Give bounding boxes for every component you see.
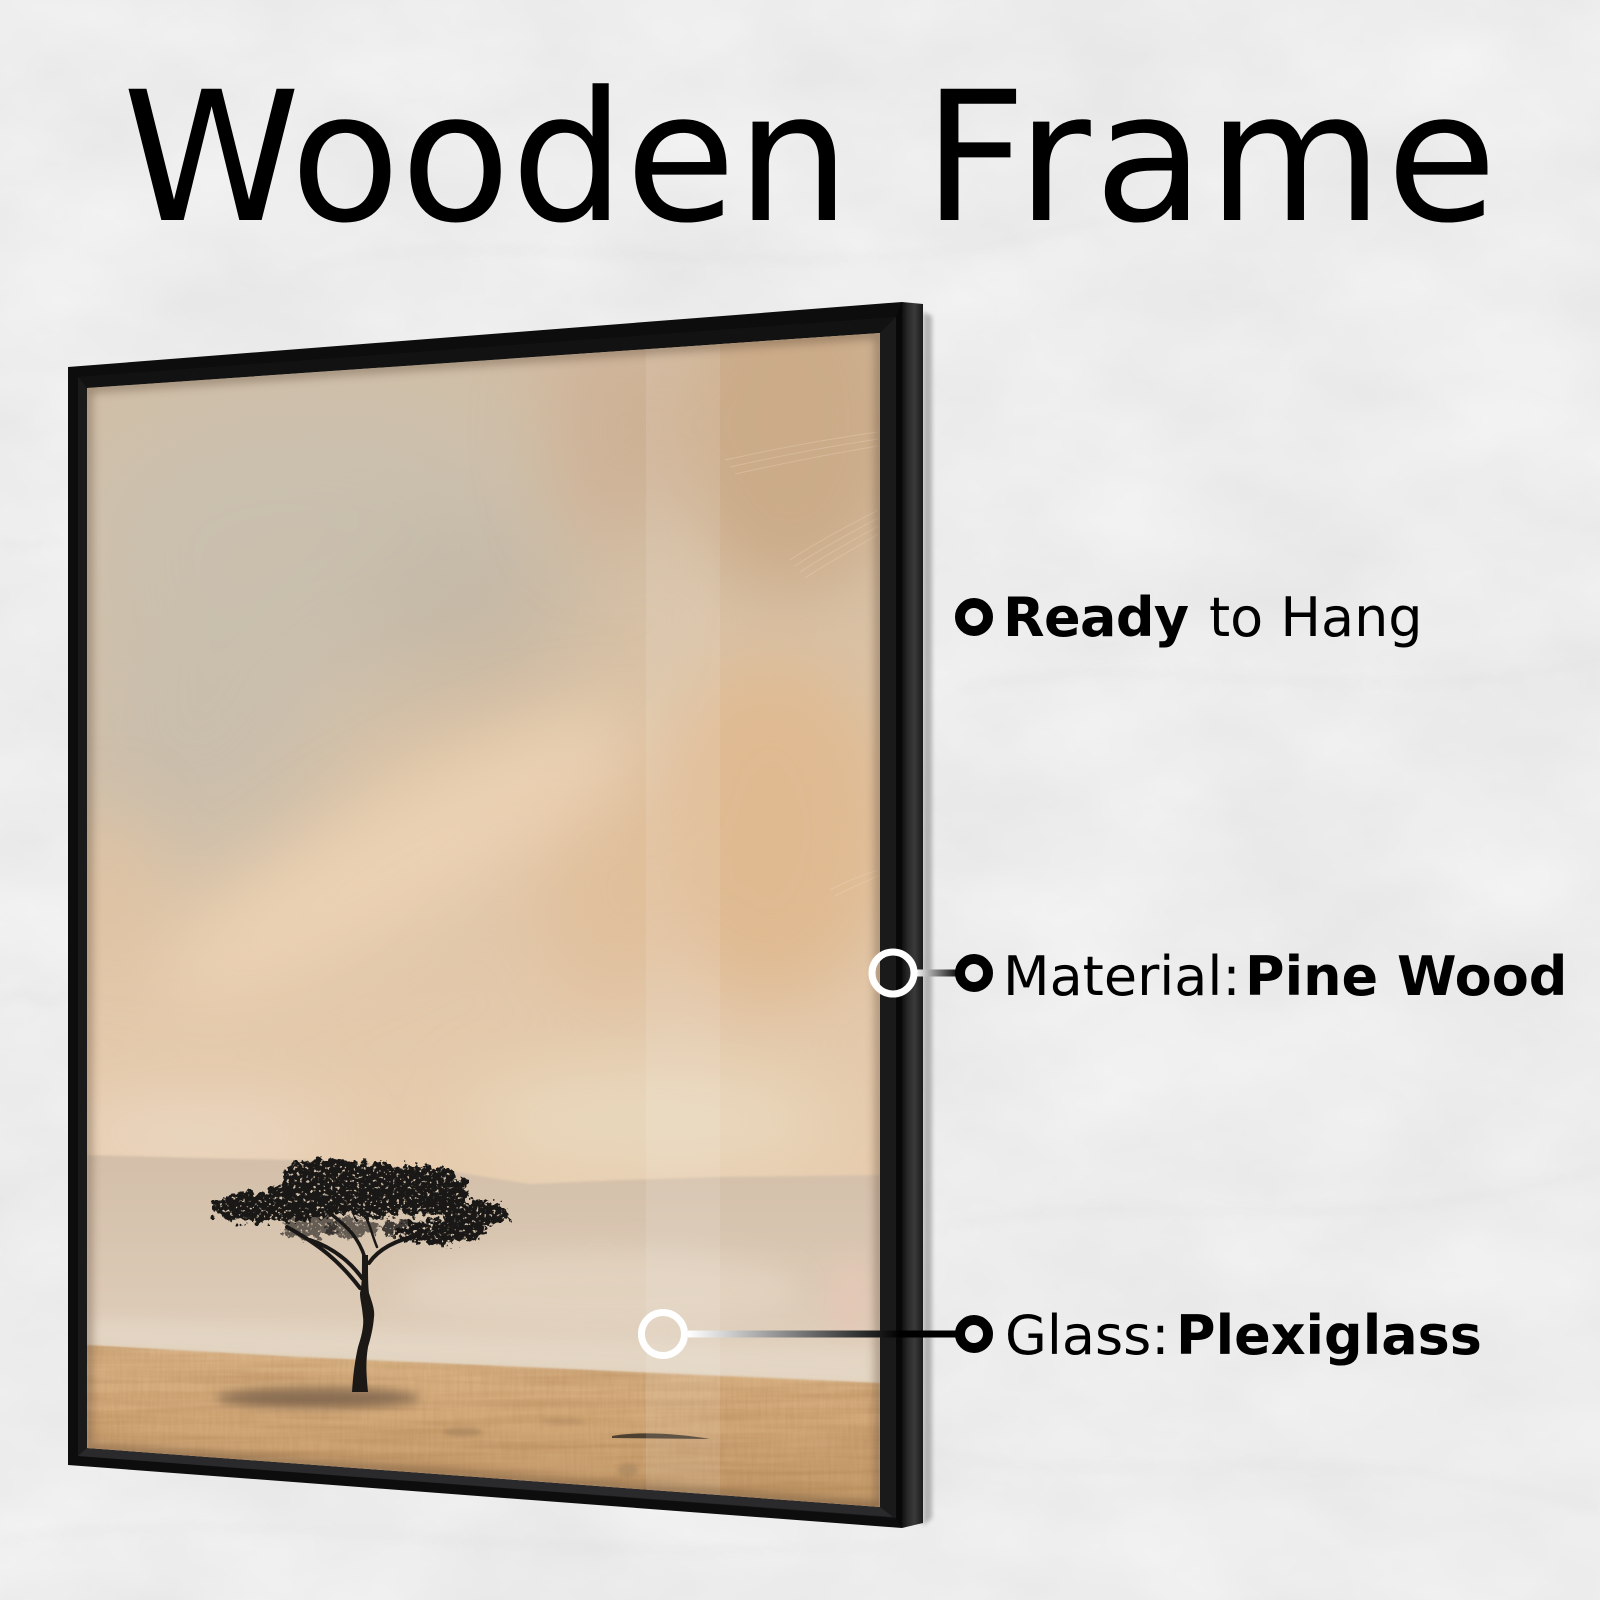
title: Wooden (122, 54, 850, 263)
label: Plexiglass (1176, 1304, 1482, 1367)
ground marks (443, 1418, 710, 1477)
brush strokes (725, 432, 878, 896)
callout: material (872, 945, 1567, 1008)
label: to Hang (1209, 586, 1423, 649)
distant mesa (87, 1155, 880, 1343)
glass reflection band (646, 320, 720, 1520)
label: Material: (1003, 945, 1241, 1008)
callout: glass (642, 1304, 1482, 1367)
title: Frame (923, 54, 1500, 263)
warm sky patches (98, 333, 880, 1166)
frame front face (68, 302, 902, 1528)
sand ground (87, 1345, 880, 1510)
grey cloud (40, 370, 580, 870)
painting: savanna (40, 250, 910, 1520)
acacia tree (212, 1158, 509, 1392)
trunk (352, 1255, 374, 1392)
label: Pine Wood (1245, 945, 1567, 1008)
connector line (688, 1330, 960, 1338)
frame side face (902, 302, 923, 1528)
label: Ready (1003, 586, 1189, 649)
inner edge shade (87, 333, 880, 1507)
connector line (914, 970, 960, 976)
frame drop shadow (923, 312, 932, 1526)
wooden frame (68, 302, 923, 1528)
callout: ready to hang (960, 586, 1423, 649)
marker ring (960, 603, 988, 631)
marker ring (960, 1320, 988, 1348)
marker ring (960, 959, 988, 987)
glass marker ring (642, 1312, 684, 1356)
label: Glass: (1005, 1304, 1169, 1367)
frame marker ring (872, 952, 914, 994)
tree shadow (216, 1388, 420, 1408)
frame bevel (78, 317, 896, 1518)
branches (287, 1213, 420, 1288)
canopy (212, 1158, 509, 1244)
